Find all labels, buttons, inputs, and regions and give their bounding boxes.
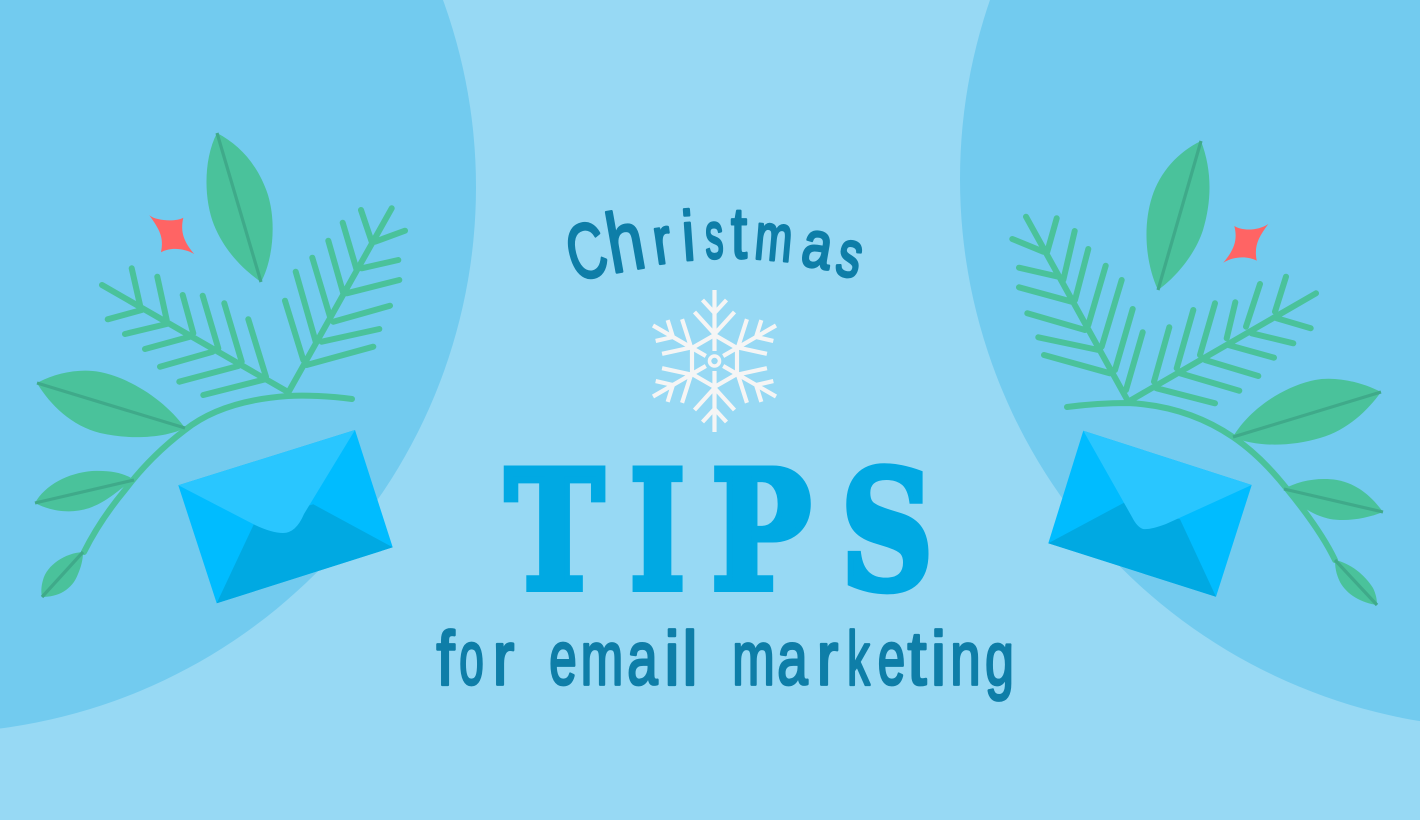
icon: main branch [84,396,352,552]
icon: top leaf [1146,141,1210,290]
subtitle: for email marketing: g [985,616,1014,701]
heading: TIPS: I [630,434,685,627]
subtitle: for email marketing: a [777,617,808,702]
icon: middle leaf [35,471,134,511]
heading: Christmas [558,192,871,299]
subtitle: for email marketing: a [627,617,658,702]
heading: Christmas: m [752,199,796,276]
subtitle: for email marketing: r [493,616,514,701]
subtitle: for email marketing: t [907,617,927,701]
left background circle [0,0,476,733]
icon: left envelope [178,430,393,603]
icon: snowflake [643,290,786,432]
heading: Christmas: s [704,199,725,273]
icon: left fir sprig [102,268,288,395]
icon: top leaf [206,133,273,282]
icon: main branch [1067,403,1335,560]
icon: red star [149,215,194,254]
icon: right fir sprig [285,208,405,393]
subtitle: for email marketing: k [847,617,870,701]
subtitle: for email marketing: e [878,616,905,701]
heading: Christmas: h [599,192,651,291]
icon: left fir sprig [1012,217,1143,402]
heading: Christmas: a [797,206,839,284]
subtitle: for email marketing: f [437,616,455,701]
subtitle: for email marketing: e [549,616,577,701]
heading: Christmas: C [558,205,616,299]
heading: TIPS: S [841,435,933,627]
subtitle: for email marketing: m [732,615,775,701]
right decoration: foliage and envelope [1012,141,1383,605]
heading: Christmas: s [830,216,871,293]
heading: TIPS [505,434,933,628]
subtitle: for email marketing [437,615,1014,702]
icon: right fir sprig [1128,277,1316,403]
right background circle [960,0,1420,728]
icon: middle leaf [1284,479,1383,520]
heading: Christmas: i [679,198,697,276]
heading: Christmas: r [648,203,676,278]
heading: Christmas: t [731,193,747,273]
icon: large leaf [37,371,185,437]
icon: right envelope [1048,431,1252,597]
subtitle: for email marketing: i [931,617,946,701]
subtitle: for email marketing: n [950,617,981,702]
subtitle: for email marketing: l [682,617,698,701]
icon: small leaf [41,552,83,597]
icon: large leaf [1233,379,1381,445]
heading: TIPS: P [711,436,811,628]
subtitle: for email marketing: m [581,615,623,701]
icon: small leaf [1335,560,1377,605]
subtitle: for email marketing: r [817,616,838,701]
subtitle: for email marketing: i [664,617,680,701]
left decoration: foliage and envelope [35,133,405,603]
heading: TIPS: T [505,436,604,628]
icon: red star [1223,224,1268,263]
subtitle: for email marketing: o [459,617,484,702]
